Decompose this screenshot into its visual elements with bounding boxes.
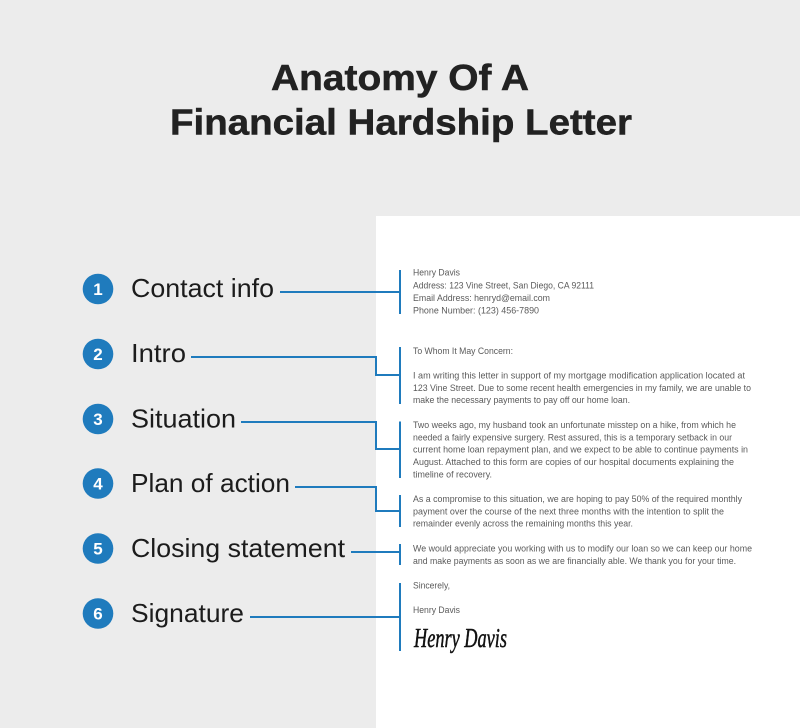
text block: intro: To Whom It May Concern: [413, 346, 513, 357]
row 3: situation [83, 404, 400, 478]
label: intro: Intro [131, 338, 186, 368]
text block: situation: timeline of recovery. [413, 469, 492, 480]
connector 6 [250, 583, 400, 651]
text block: sign-off: Sincerely, [413, 580, 450, 592]
badge 6 [83, 598, 113, 629]
text block: situation: August. Attached to this form are copies of our hospital documents explaining the [413, 457, 734, 468]
row 5: closing statement [83, 533, 400, 565]
row 6: signature [83, 583, 400, 651]
badge 5 [83, 533, 113, 564]
text block: intro [413, 346, 751, 406]
label: contact info: Contact info [131, 273, 274, 303]
text block: situation [413, 420, 748, 480]
text block: plan of action: remainder evenly across the remaining months this year. [413, 519, 633, 530]
text block: situation: needed a fairly expensive surgery. Rest assured, this is a temporary setback in our [413, 432, 733, 443]
title: Anatomy Of A [271, 57, 529, 98]
text block: contact details: Email Address: henryd@email.com [413, 293, 550, 304]
text block: situation: Two weeks ago, my husband took an unfortunate misstep on a hike, from which he [413, 420, 736, 431]
label: signature: Signature [131, 598, 244, 628]
label: closing statement: Closing statement [131, 533, 346, 563]
badge 1 [83, 274, 113, 304]
text block: plan of action: payment over the course of the next three months with the intention to split the [413, 506, 724, 517]
badge 5: 5 [93, 540, 103, 558]
badge 4: 4 [93, 474, 103, 494]
badge 4 [83, 468, 113, 499]
row 2: intro [83, 338, 400, 404]
badge 1: 1 [93, 280, 103, 299]
badge 2: 2 [93, 345, 103, 364]
badge 2 [83, 339, 113, 369]
text block: contact details: Address: 123 Vine Street, San Diego, CA 92111 [413, 280, 594, 292]
badge 3: 3 [93, 410, 103, 429]
text block: contact details [413, 268, 594, 316]
text block: situation: current home loan repayment plan, and we expect to be able to continue payments in [413, 445, 748, 456]
label: situation: Situation [131, 404, 236, 434]
text block: closing statement: and make payments as soon as we are financially able. We thank you for your time. [413, 556, 736, 567]
text block: contact details: Henry Davis [413, 268, 460, 278]
text block: closing statement [413, 544, 752, 567]
title [170, 57, 632, 142]
title: Financial Hardship Letter [170, 102, 632, 142]
badge 6: 6 [93, 604, 103, 624]
text block: intro: make the necessary payments to pay off our home loan. [413, 395, 630, 406]
row 1: contact info [83, 270, 400, 314]
text block: plan of action [413, 494, 742, 530]
badge 3 [83, 404, 113, 434]
connector 4 [295, 487, 400, 527]
text block: contact details: Phone Number: (123) 456-7890 [413, 306, 539, 316]
text block: closing statement: We would appreciate you working with us to modify our loan so we can keep our home [413, 544, 752, 555]
label: plan of action: Plan of action [131, 468, 290, 498]
text block: intro: 123 Vine Street. Due to some recent health emergencies in my family, we are unable to [413, 383, 751, 394]
text block: sign-off: Henry Davis [413, 605, 460, 616]
text block: intro: I am writing this letter in support of my mortgage modification application located at [413, 370, 745, 382]
row 4: plan of action [83, 468, 400, 527]
connector 5 [351, 544, 400, 565]
connector 3 [241, 422, 400, 478]
connector 2 [191, 347, 400, 404]
signature: Henry Davis [413, 623, 507, 653]
panel: letter page [376, 216, 800, 728]
connector 1 [280, 270, 400, 314]
text block: sign-off [413, 580, 460, 616]
text block: plan of action: As a compromise to this situation, we are hoping to pay 50% of the required monthly [413, 494, 742, 505]
